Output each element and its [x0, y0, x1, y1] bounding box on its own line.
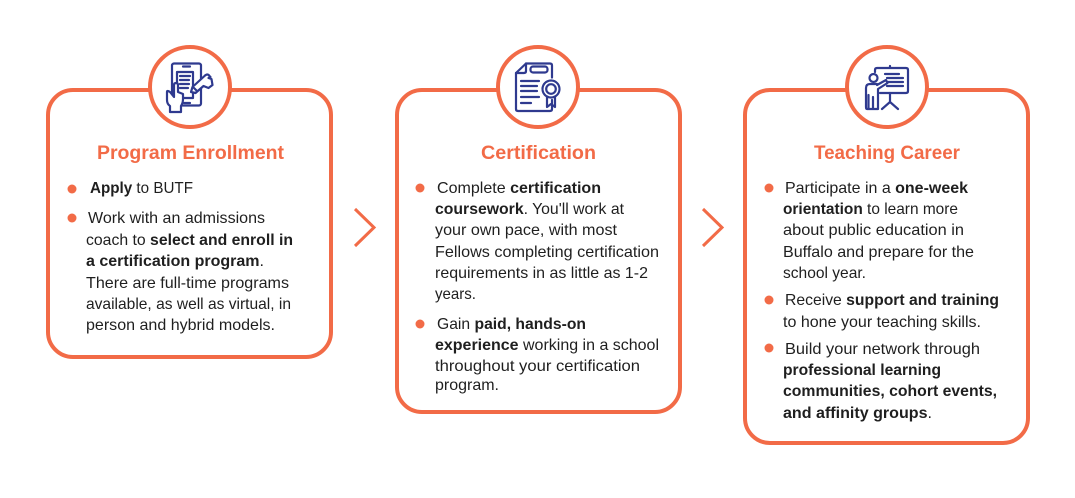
bullet: coursework: Complete certification [437, 180, 601, 197]
icon: teacher at presentation board [847, 47, 927, 127]
icon: tablet, hand and pen [150, 47, 230, 127]
card outline: program enrollment [48, 90, 331, 357]
bullet: network: and affinity groups. [783, 405, 932, 422]
heading: certification: Certification [481, 142, 596, 164]
bullet: coursework: requirements in as little as 1-2 [435, 265, 648, 282]
bullet: support and training: to hone your teaching skills. [783, 314, 981, 331]
bullet: orientation: about public education in [783, 222, 964, 239]
bullet: support and training [764, 292, 999, 331]
bullet: network: communities, cohort events, [783, 383, 997, 400]
bullet: hands-on experience: experience working in a school [435, 337, 659, 354]
bullet: coursework: your own pace, with most [435, 222, 618, 239]
bullet: hands-on experience: throughout your certification [435, 358, 640, 375]
bullet: apply: Apply to BUTF [90, 180, 193, 197]
card outline: teaching career [745, 90, 1028, 443]
heading: program enrollment: Program Enrollment [97, 142, 285, 164]
heading: teaching career: Teaching Career [814, 142, 960, 164]
bullet: coursework: years. [435, 286, 476, 303]
bullet: admissions coach: Work with an admissions [88, 210, 265, 227]
bullet: admissions coach: a certification program. [86, 253, 264, 270]
bullet: hands-on experience [416, 316, 659, 394]
bullet: support and training: Receive support and training [785, 292, 999, 309]
arrow: enrollment to certification [355, 209, 374, 246]
bullet: coursework: Fellows completing certification [435, 244, 659, 261]
icon: certificate with seal [498, 47, 578, 127]
bullet: coursework: coursework. You'll work at [435, 201, 625, 218]
bullet: admissions coach: There are full-time programs [86, 275, 289, 292]
bullet: hands-on experience: Gain paid, hands-on [437, 316, 586, 333]
bullet: hands-on experience: program. [435, 377, 499, 394]
card outline: certification [397, 90, 680, 412]
bullet: coursework [416, 180, 659, 303]
bullet: network: Build your network through [785, 341, 980, 358]
panel: program enrollment [48, 47, 331, 357]
bullet: orientation: school year. [783, 265, 866, 282]
bullet: admissions coach [68, 210, 293, 334]
bullet: admissions coach: coach to select and enroll in [86, 232, 293, 249]
bullet: orientation [764, 180, 974, 282]
bullet: admissions coach: available, as well as virtual, in [86, 296, 291, 313]
bullet: network: professional learning [783, 362, 941, 379]
bullet: orientation: Participate in a one-week [785, 180, 968, 197]
panel: certification [397, 47, 680, 412]
bullet: admissions coach: person and hybrid models. [86, 317, 275, 334]
arrow: certification to teaching career [703, 209, 722, 246]
bullet: orientation: orientation to learn more [783, 201, 958, 218]
panel: teaching career [745, 47, 1028, 443]
bullet: orientation: Buffalo and prepare for the [783, 244, 974, 261]
bullet: network [764, 341, 997, 422]
